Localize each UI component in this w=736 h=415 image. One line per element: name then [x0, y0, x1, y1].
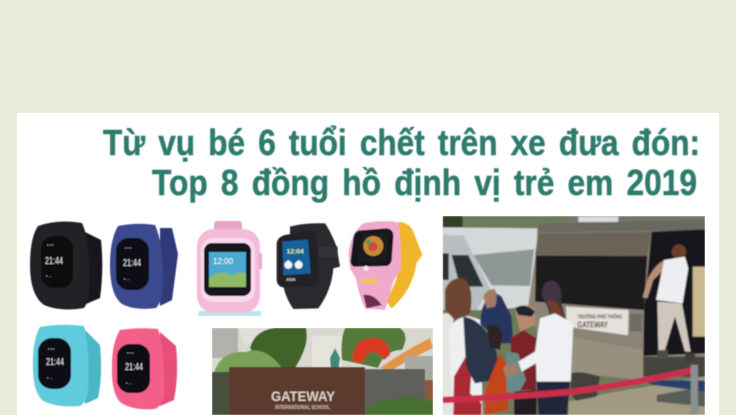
- photo: black kid watch: [30, 222, 102, 309]
- photo: pink kid watch: [112, 328, 177, 409]
- photo: pink smart watch: 12:00: [213, 257, 234, 266]
- ground: [568, 377, 705, 415]
- photo: cyan kid watch: 21:44: [46, 357, 64, 368]
- photo: Gateway school sign: INTERNATIONAL SCHOOL: [275, 405, 330, 411]
- title: [103, 122, 700, 203]
- children and adults: [443, 313, 453, 415]
- red rope barrier: [443, 371, 692, 400]
- white van: [443, 227, 537, 310]
- photo: black smart watch: [277, 223, 340, 309]
- photo: pink kid watch: • ...: [126, 380, 132, 385]
- photo: blue kid watch: • • •: [125, 245, 132, 250]
- photo: black kid watch: 21:44: [45, 256, 63, 267]
- panel: white card: [17, 113, 719, 415]
- photo: black kid watch: • ...: [46, 273, 52, 278]
- photo: pink kid watch: 21:44: [125, 362, 143, 373]
- bus sign: [566, 307, 629, 335]
- photo: school bus and children: TRƯỜNG PHỔ THÔNG: [577, 313, 623, 321]
- photo: cyan kid watch: • • •: [48, 346, 55, 351]
- bus door: [643, 229, 705, 356]
- photo: pink smart watch: [197, 221, 262, 316]
- photo: black smart watch: AVA: [286, 277, 296, 283]
- photo: Gateway school sign: [212, 328, 433, 415]
- grey bus: [528, 219, 705, 380]
- photo: black kid watch: • • •: [47, 242, 54, 247]
- woman in doorway: [672, 244, 686, 259]
- photo: cyan kid watch: [33, 325, 101, 406]
- photo: blue kid watch: [110, 224, 178, 309]
- photo: blue kid watch: 21:44: [123, 258, 141, 269]
- photo: black smart watch: 12:04: [287, 248, 304, 255]
- photo: cyan kid watch: • ...: [47, 375, 53, 380]
- photo: school bus and children: GATEWAY: [577, 319, 608, 329]
- photo: Gateway school sign: GATEWAY: [271, 388, 336, 404]
- photo: pink and yellow smart watch: [349, 221, 422, 310]
- photo: school bus and children: [443, 216, 705, 415]
- background trees: [443, 216, 705, 415]
- photo: blue kid watch: • ...: [124, 276, 130, 281]
- photo: pink kid watch: • • •: [127, 350, 134, 355]
